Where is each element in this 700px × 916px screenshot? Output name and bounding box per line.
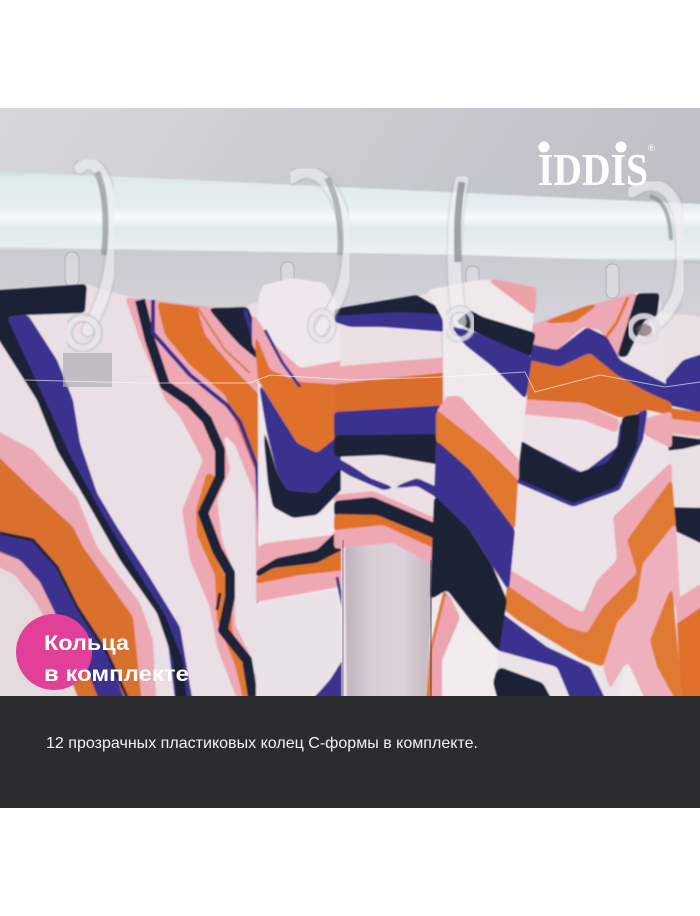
infographic canvas: [0, 108, 700, 808]
thin orange line: [197, 307, 250, 373]
curtain: [0, 278, 700, 715]
badge: pink circle: [16, 614, 92, 690]
badge text: [46, 636, 188, 681]
ring 2: [292, 172, 348, 340]
hem stitching: [25, 372, 700, 392]
dark wavy line: [140, 300, 253, 697]
brand logo: ®: [648, 143, 655, 153]
thin navy line: [150, 299, 259, 604]
left lower pink strip: [0, 552, 56, 616]
top dark blob: [210, 306, 258, 358]
left big pink band: [0, 424, 157, 715]
lower orange strip: [195, 472, 249, 696]
curtain panel D: [425, 279, 537, 715]
centre pink band: [125, 297, 264, 715]
light sliver: [217, 433, 258, 690]
main dark band: [0, 284, 188, 715]
curtain panel B: [252, 278, 350, 715]
curtain panel C: [334, 290, 450, 715]
badge text: Кольца: [44, 632, 129, 655]
ring 4: [630, 185, 682, 342]
curtain panel F: [662, 314, 700, 696]
photo: rod and curtain: [0, 108, 700, 715]
curtain panel A: [0, 284, 265, 715]
ring 3: [447, 180, 473, 339]
orange band: [157, 302, 259, 470]
main navy band: [7, 315, 195, 715]
brand logo: IDDIS: [538, 144, 648, 195]
dark caption band: [0, 696, 700, 808]
fold lines: [342, 540, 432, 696]
left lower navy band: [0, 530, 124, 696]
caption text: 12 прозрачных пластиковых колец С-формы в комплекте.: [46, 735, 478, 752]
left lower light area: [0, 566, 79, 696]
ring 1: [68, 164, 113, 348]
badge text: в комплекте: [44, 663, 189, 686]
left orange band: [0, 458, 142, 696]
reinforcement patch: [63, 353, 112, 387]
hidden hooks: [65, 252, 619, 298]
wall: [0, 108, 700, 360]
curtain panel E: [488, 292, 684, 715]
curtain rod: [0, 170, 700, 264]
